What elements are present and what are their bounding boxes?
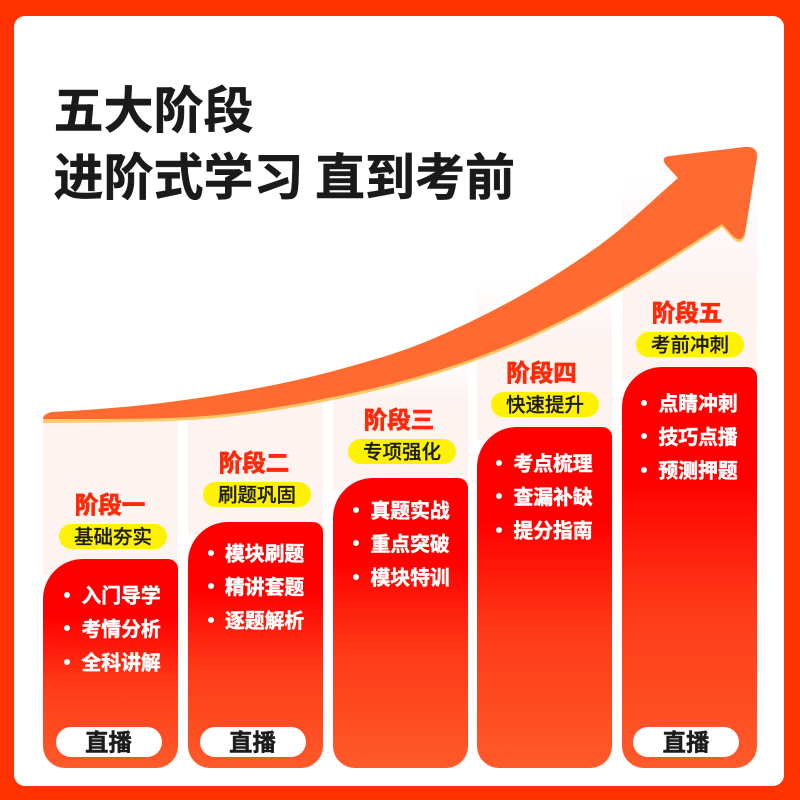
- stage one tag: [59, 524, 167, 549]
- panel: stage one: [43, 491, 178, 768]
- stage three list: [353, 500, 450, 590]
- stage one red box: [43, 559, 178, 768]
- stage five heading: 阶段五: [652, 299, 722, 326]
- stage four list: 查漏补缺: [514, 487, 593, 509]
- stage one live badge: [56, 727, 162, 757]
- stage five tag: 考前冲刺: [651, 334, 729, 356]
- stage two red box: [188, 522, 323, 768]
- stage five tag: [636, 332, 744, 357]
- stage one heading: 阶段一: [75, 491, 145, 518]
- stage four list: 考点梳理: [514, 452, 593, 476]
- panel: stage five: [622, 299, 757, 768]
- panel: stage three: [333, 406, 468, 768]
- stage four list: 提分指南: [514, 520, 593, 542]
- stage three list: 重点突破: [370, 533, 450, 556]
- stage one tag: 基础夯实: [74, 526, 152, 548]
- stage three tag: [348, 439, 456, 464]
- stage two list: 模块刷题: [225, 542, 304, 566]
- arrow: [43, 147, 757, 423]
- stage five list: [641, 394, 738, 482]
- stage one list: 全科讲解: [82, 652, 161, 674]
- stage two tag: 刷题巩固: [218, 484, 296, 506]
- stage one live badge: 直播: [85, 730, 132, 756]
- stage two list: 精讲套题: [225, 577, 304, 599]
- stage one list: [64, 584, 161, 674]
- stage two list: 逐题解析: [225, 610, 304, 632]
- stage four tag: [491, 392, 599, 417]
- panel: stage four: [477, 359, 612, 768]
- stage two live badge: [200, 727, 306, 757]
- stage four list: [496, 452, 593, 542]
- title: 进阶式学习: [54, 150, 304, 206]
- stage five list: 技巧点播: [658, 427, 738, 449]
- stage four red box: [477, 427, 612, 768]
- stage three tag: 专项强化: [363, 442, 441, 464]
- stage two list: [208, 542, 304, 632]
- stage four tag: 快速提升: [506, 394, 584, 416]
- stage two tag: [203, 482, 311, 507]
- stage two live badge: 直播: [229, 730, 276, 756]
- title: 五大阶段: [54, 83, 254, 139]
- stage two heading: 阶段二: [219, 449, 289, 476]
- pale column backgrounds: [43, 175, 757, 575]
- stage five red box: [622, 367, 757, 768]
- stage three list: 真题实战: [370, 500, 450, 522]
- stage five list: 点睛冲刺: [658, 394, 738, 416]
- stage one list: 考情分析: [82, 619, 161, 641]
- title: 直到考前: [315, 150, 515, 206]
- stage four heading: 阶段四: [506, 359, 577, 386]
- stage five list: 预测押题: [658, 460, 738, 482]
- stage three red box: [333, 478, 468, 768]
- title: [54, 83, 515, 206]
- stage one list: 入门导学: [82, 584, 161, 608]
- stage three heading: 阶段三: [364, 406, 434, 433]
- stage five live badge: [633, 727, 739, 757]
- stage five live badge: 直播: [662, 730, 710, 756]
- panel: stage two: [188, 449, 323, 768]
- stage three list: 模块特训: [370, 566, 450, 590]
